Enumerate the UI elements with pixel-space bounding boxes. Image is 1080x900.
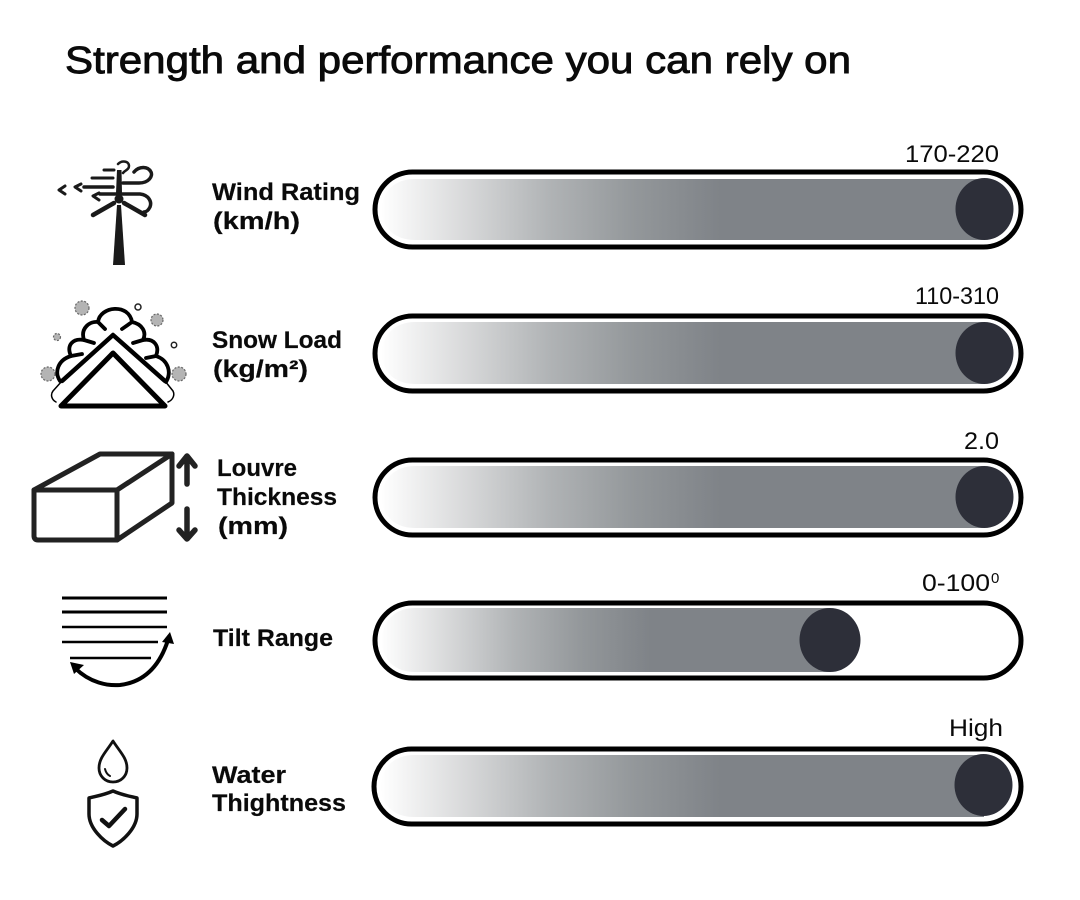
bar: wind rating	[375, 172, 1021, 247]
icon: tilting louvres	[62, 598, 174, 685]
label: water tightness: Water	[212, 762, 286, 789]
label: water tightness: Thightness	[212, 790, 346, 817]
row: water tightness	[89, 715, 1021, 846]
row: tilt range	[62, 570, 1021, 685]
icon: wind turbine	[59, 162, 152, 265]
bar: louvre thickness	[375, 460, 1021, 535]
row: wind rating	[59, 141, 1021, 265]
row: louvre thickness	[34, 428, 1021, 540]
label: louvre thickness: (mm)	[218, 513, 288, 540]
value: 110-310: 110-310	[915, 283, 999, 310]
value: 2.0: 2.0	[964, 428, 999, 455]
value: 0-100 degrees: 0	[991, 570, 999, 587]
icon: water drop and shield	[89, 741, 137, 846]
value: High: High	[949, 715, 1003, 742]
label: snow load: Snow Load	[212, 327, 342, 354]
row: snow load	[41, 283, 1021, 406]
icon: louvre block with arrows	[34, 454, 195, 540]
label: wind rating: Wind Rating	[212, 179, 360, 206]
value: 0-100 degrees: 0-100	[922, 570, 990, 597]
icon: snowy roof	[41, 301, 186, 406]
value: 170-220: 170-220	[905, 141, 999, 168]
label: louvre thickness: Louvre	[217, 455, 297, 482]
label: louvre thickness: Thickness	[217, 484, 337, 511]
bar: tilt range	[375, 603, 1021, 678]
bar: water tightness	[374, 749, 1021, 824]
label: wind rating: (km/h)	[213, 208, 300, 235]
title: Strength and performance you can rely on	[65, 40, 851, 82]
label: snow load: (kg/m²)	[213, 356, 308, 383]
bar: snow load	[375, 316, 1021, 391]
label: tilt range: Tilt Range	[213, 625, 333, 652]
